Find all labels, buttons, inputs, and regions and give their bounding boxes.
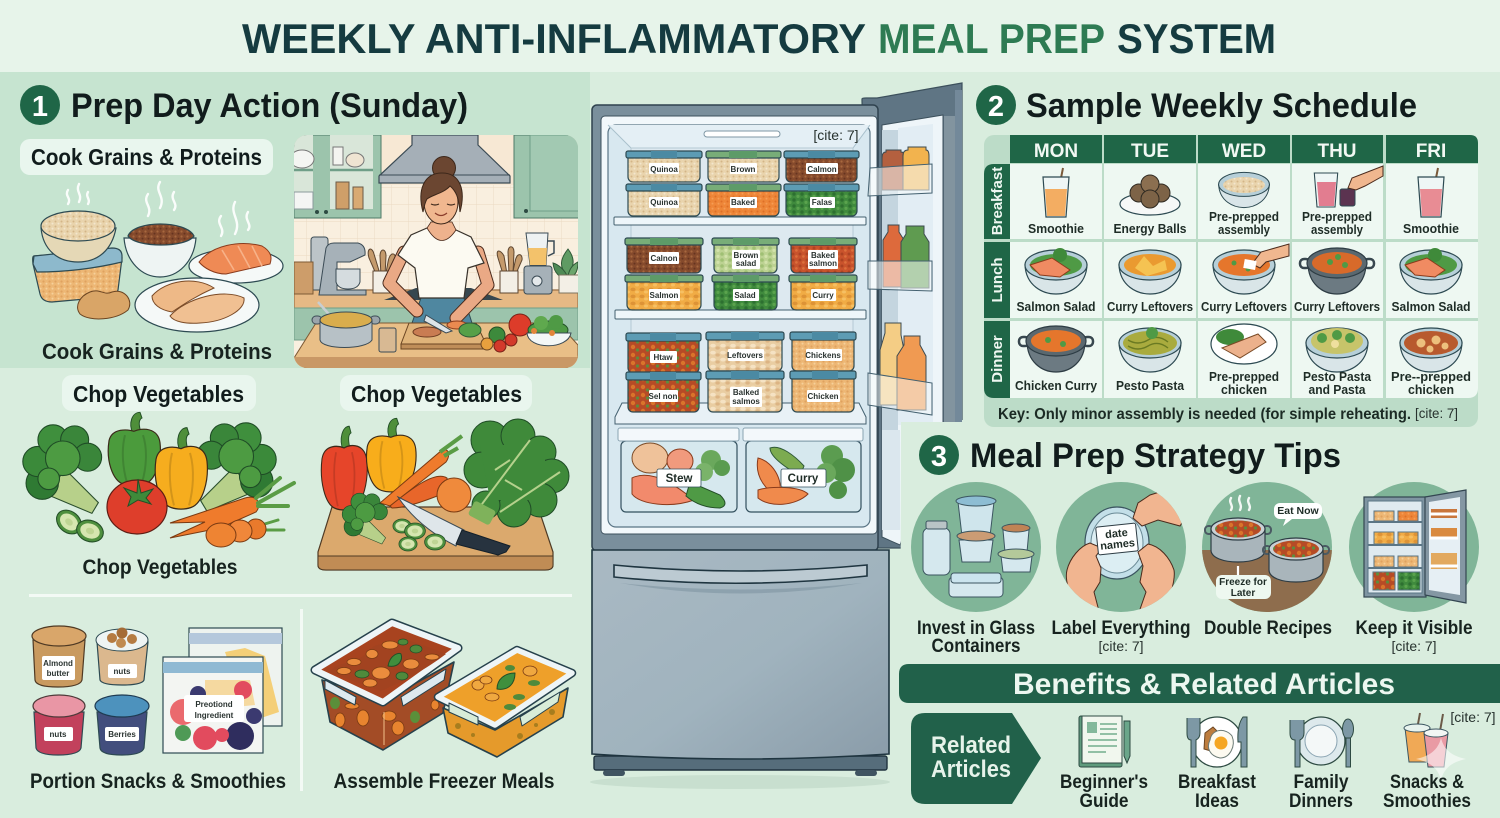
jar: berries blue: Berries — [108, 730, 136, 739]
back counter — [294, 290, 578, 309]
cell labels: assembly — [1218, 222, 1271, 237]
salad bowl — [527, 315, 571, 346]
article captions: Ideas — [1195, 791, 1239, 812]
container: curry — [438, 650, 572, 757]
crisper drawer: stew — [618, 428, 739, 512]
fridge: Balked — [733, 388, 759, 397]
fridge: Brown — [734, 251, 759, 260]
blender — [524, 233, 554, 294]
boxes — [294, 262, 313, 294]
fridge: Baked — [811, 251, 835, 260]
fridge: Salad — [734, 291, 756, 300]
pill: chop vegetables right — [340, 375, 532, 411]
bags: Ingredient — [195, 711, 234, 720]
tip: double recipes: Eat Now — [1277, 505, 1320, 517]
day headers: WED — [1222, 141, 1266, 162]
row 4 containers — [625, 275, 703, 310]
meal row labels — [984, 164, 1010, 398]
jar: berries pink — [33, 695, 85, 755]
icon: guide — [1079, 716, 1130, 767]
fridge: Curry — [812, 291, 834, 300]
fridge interior — [608, 125, 870, 527]
benefits banner — [899, 664, 1500, 703]
cite: [cite: 7] — [813, 127, 859, 143]
section 2 heading: 2 — [988, 91, 1004, 123]
tip captions: Invest in Glass — [917, 618, 1035, 639]
icon: breakfast — [1187, 717, 1247, 767]
tip captions: Double Recipes — [1204, 618, 1332, 639]
cell labels: Curry Leftovers — [1294, 299, 1380, 314]
section 3 heading: 3 — [931, 441, 947, 473]
article captions — [1060, 772, 1471, 812]
jar: berries blue — [95, 695, 149, 755]
crisper drawer: curry — [743, 428, 863, 512]
cite: related: [cite: 7] — [1450, 709, 1496, 725]
row 5 containers — [626, 333, 701, 373]
cell labels: Energy Balls — [1114, 221, 1186, 236]
caption: cook grains and proteins: Cook Grains & Proteins — [42, 339, 272, 364]
row 1 containers — [626, 151, 702, 182]
utensil crock right — [497, 247, 522, 293]
benefits banner: Benefits & Related Articles — [1013, 668, 1395, 701]
tip: double recipes — [1200, 482, 1335, 620]
jar: berries pink: nuts — [50, 730, 67, 739]
woman — [389, 156, 488, 323]
caption: chop vegetables: Chop Vegetables — [82, 556, 238, 579]
pill: cook grains and proteins — [20, 139, 273, 175]
day headers: TUE — [1131, 141, 1169, 162]
cells — [1010, 164, 1478, 398]
tip captions: [cite: 7] — [1098, 638, 1144, 654]
illustration: portioned snacks — [32, 626, 282, 755]
caption: portion snacks: Portion Snacks & Smoothies — [30, 770, 286, 793]
cutting board and food — [401, 314, 531, 352]
fridge: Brown — [731, 165, 756, 174]
front counter — [294, 323, 578, 368]
article captions: Family — [1294, 772, 1349, 793]
schedule key: [cite: 7] — [1415, 406, 1458, 421]
tip captions: Containers — [932, 636, 1020, 657]
fridge: Leftovers — [727, 351, 764, 360]
tip: label — [1056, 482, 1190, 615]
kitchen scene — [290, 135, 580, 368]
tip: glass containers — [911, 482, 1041, 612]
cell labels: Curry Leftovers — [1201, 299, 1287, 314]
pill: chop vegetables left — [62, 375, 256, 411]
related articles arrow: Articles — [931, 756, 1011, 783]
meal row labels: Breakfast — [989, 167, 1006, 235]
tip: keep it visible — [1349, 482, 1479, 612]
stock pot — [312, 302, 380, 348]
fridge — [590, 83, 962, 789]
tip captions: Label Everything — [1052, 618, 1190, 639]
container: stew — [315, 623, 458, 750]
panel: section 1 top background — [0, 72, 590, 368]
jar: almond butter: butter — [47, 669, 69, 678]
article captions: Smoothies — [1383, 791, 1471, 812]
panel: section 3 background — [900, 420, 1500, 818]
related articles arrow: Related — [931, 732, 1011, 759]
illustration: grains and proteins — [33, 182, 283, 332]
title: WEEKLY ANTI-INFLAMMATORY — [242, 15, 866, 62]
article captions: Breakfast — [1178, 772, 1257, 793]
tip: label: date — [1105, 527, 1128, 541]
header band — [0, 0, 1500, 72]
fridge light — [704, 131, 780, 137]
range hood — [379, 135, 510, 183]
schedule key: Key: Only minor assembly is needed (for simple reheating. — [998, 406, 1411, 423]
row 6 containers: Sel non — [649, 392, 678, 401]
cell labels: Pre-prepped — [1302, 209, 1372, 224]
meal row labels: Lunch — [989, 258, 1006, 302]
jar: nuts — [96, 628, 148, 685]
fridge: salad — [736, 259, 756, 268]
tip: label: names — [1100, 537, 1136, 553]
pill: chop vegetables right: Chop Vegetables — [351, 381, 522, 407]
lunch icons — [1025, 244, 1462, 294]
cell labels: Chicken Curry — [1015, 378, 1098, 393]
divider horizontal — [29, 594, 572, 597]
fridge: salmon — [809, 259, 837, 268]
jar: almond butter: Almond — [43, 659, 73, 668]
tip captions: [cite: 7] — [1392, 638, 1436, 654]
cell labels: Pre-prepped — [1209, 209, 1279, 224]
cell labels — [1015, 209, 1471, 397]
fridge shadow — [590, 775, 890, 789]
cell labels: Salmon Salad — [1016, 299, 1096, 314]
article captions: Snacks & — [1390, 772, 1464, 793]
fridge: Chicken — [807, 392, 839, 401]
tip: double recipes: Freeze for — [1219, 577, 1267, 588]
cell labels: Pesto Pasta — [1116, 378, 1185, 393]
illustration: freezer meals — [315, 623, 572, 757]
row 1 containers: Quinoa — [650, 165, 678, 174]
schedule backing — [984, 135, 1478, 427]
article captions: Guide — [1080, 791, 1128, 812]
fridge: Calmon — [807, 165, 837, 174]
cell labels: Curry Leftovers — [1107, 299, 1193, 314]
bags — [163, 628, 282, 753]
utensil crock left — [368, 249, 395, 293]
title — [242, 15, 1276, 62]
fridge upper body — [592, 105, 878, 551]
illustration: whole vegetables — [23, 412, 294, 547]
cell labels: Smoothie — [1403, 221, 1459, 236]
day headers: MON — [1034, 141, 1078, 162]
day headers: THU — [1317, 141, 1357, 162]
fridge door — [862, 83, 962, 548]
cell labels: and Pasta — [1308, 382, 1366, 397]
crisper drawer: stew: Stew — [666, 473, 692, 485]
cell labels: Pre--prepped — [1391, 369, 1471, 384]
meal row labels: Dinner — [989, 335, 1006, 383]
related articles arrow — [911, 713, 1041, 804]
cell labels: Smoothie — [1028, 221, 1084, 236]
icon: smoothies — [1404, 713, 1466, 780]
day headers: FRI — [1416, 141, 1446, 162]
row 5 containers: Htaw — [653, 353, 673, 362]
row 2 containers: Quinoa — [650, 198, 678, 207]
door shelf 2 — [868, 225, 932, 291]
row 3 containers: Calnon — [650, 254, 678, 263]
tip captions — [917, 618, 1472, 657]
dinner icons — [1019, 324, 1462, 372]
pill: cook grains and proteins: Cook Grains & Proteins — [31, 144, 262, 170]
bags: Preotiond — [195, 700, 233, 709]
article captions: Dinners — [1289, 791, 1353, 812]
cell labels: Pre-prepped — [1209, 369, 1279, 384]
breakfast icons — [1043, 166, 1444, 217]
schedule table — [984, 135, 1478, 427]
section 3 heading: Meal Prep Strategy Tips — [970, 437, 1341, 475]
door shelf 3 — [868, 323, 932, 415]
crisper drawer: curry: Curry — [788, 473, 819, 485]
plant — [553, 249, 579, 293]
section 2 heading: Sample Weekly Schedule — [1026, 87, 1417, 125]
tip captions: Keep it Visible — [1356, 618, 1472, 639]
cell labels: chicken — [1221, 382, 1267, 397]
cell labels: chicken — [1408, 382, 1454, 397]
cabinets — [290, 135, 580, 218]
icon: plate — [1290, 717, 1354, 767]
article captions: Beginner's — [1060, 772, 1148, 793]
tip: double recipes: Later — [1231, 588, 1255, 599]
jar: nuts: nuts — [114, 667, 131, 676]
section 1 heading: 1 — [32, 91, 48, 123]
jar: almond butter — [32, 626, 86, 687]
fridge: Falas — [812, 198, 833, 207]
shelves — [614, 217, 866, 225]
title: SYSTEM — [1117, 15, 1276, 62]
day headers — [1010, 135, 1478, 163]
cell labels: Pesto Pasta — [1303, 369, 1372, 384]
cell labels: Salmon Salad — [1392, 299, 1471, 314]
stand mixer — [311, 237, 366, 295]
door shelf 1 — [868, 147, 932, 196]
row 4 containers: Salmon — [650, 291, 679, 300]
spice jar — [379, 328, 396, 352]
pill: chop vegetables left: Chop Vegetables — [73, 381, 244, 407]
fridge: salmos — [732, 397, 760, 406]
illustration: vegetables on board — [318, 418, 569, 570]
cell labels: assembly — [1311, 222, 1364, 237]
row 6 containers — [626, 372, 701, 412]
row 3 containers — [625, 238, 703, 273]
freezer drawer — [592, 550, 889, 776]
title: MEAL PREP — [878, 15, 1105, 62]
section 1 heading: Prep Day Action (Sunday) — [71, 87, 468, 125]
caption: assemble freezer meals: Assemble Freezer Meals — [334, 770, 554, 793]
fridge: Baked — [731, 198, 755, 207]
row 2 containers — [626, 184, 702, 216]
fridge: Chickens — [805, 351, 841, 360]
